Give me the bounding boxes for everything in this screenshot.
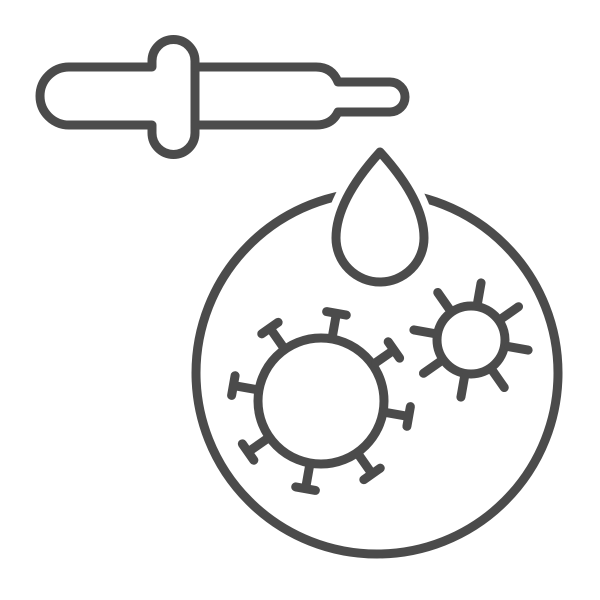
petri dish circle (196, 192, 558, 554)
icon: drop (336, 152, 424, 282)
icon: pipette dropper (40, 40, 405, 154)
icon: small virus (414, 283, 528, 397)
icon: large virus (232, 312, 410, 490)
